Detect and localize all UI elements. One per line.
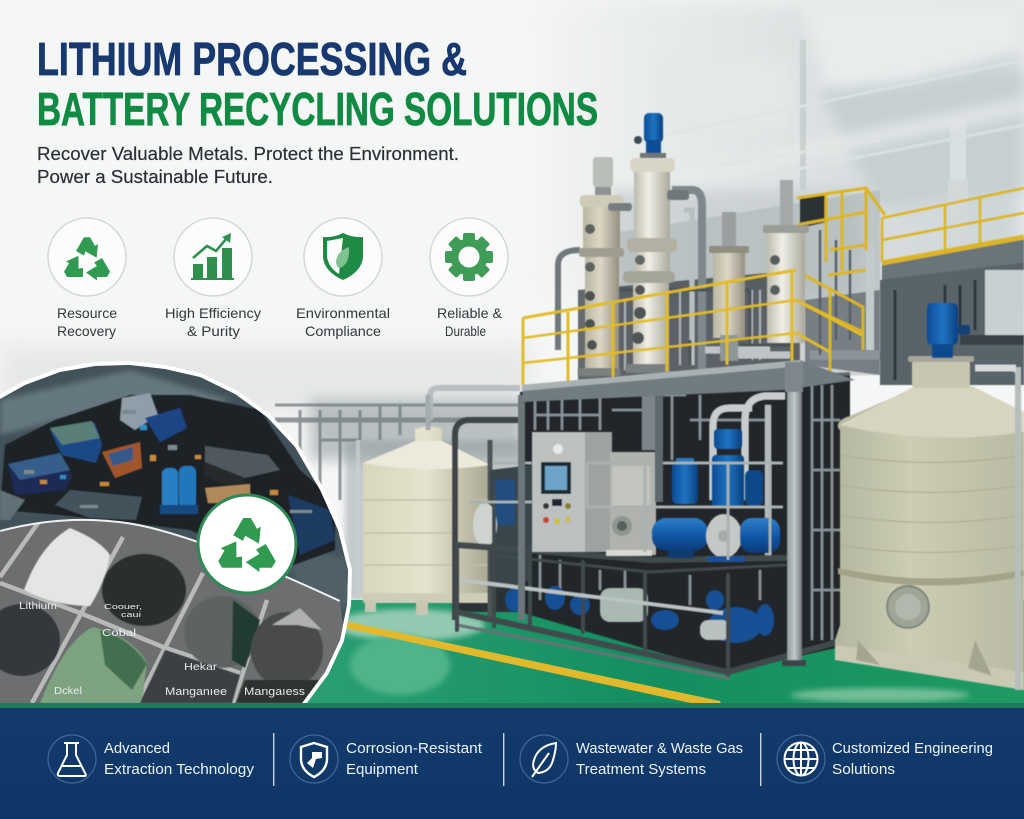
feature: customized engineering solutions: Customized Engineering [832,740,993,757]
divider [273,733,274,786]
powder labels: Manganıee [165,686,227,698]
feature: advanced extraction technology: Advanced [104,740,170,757]
battery: lower slab [55,490,142,520]
illustration: hazy factory hall backdrop [0,0,1024,600]
powder labels [19,601,306,698]
subtitle [37,144,459,187]
powder labels: Dckel [54,686,82,697]
column B [608,113,689,373]
benefit: reliable and durable [430,218,508,339]
feature: advanced extraction technology: Extraction Technology [104,761,255,778]
illustration: process columns [578,113,809,376]
title: BATTERY RECYCLING SOLUTIONS [37,83,598,135]
illustration: upper mid pipes and background gantry [558,190,885,380]
feature: customized engineering solutions [777,735,993,783]
icon: shield with leaf [304,218,382,296]
battery: orange module [102,442,142,478]
battery: left module [8,465,72,496]
powder: dark [0,604,60,676]
illustration: lower skid frame and pumps [457,465,845,678]
powder labels: Mangaıess [244,686,306,698]
divider [760,733,761,786]
icon: leaf [520,735,568,783]
benefit: high efficiency and purity: & Purity [187,323,240,339]
powder: green [40,627,147,703]
feature: corrosion-resistant equipment: Equipment [346,761,419,778]
powder: black [102,554,186,626]
icon: flask [48,735,96,783]
powder labels: Cobal [102,628,136,639]
illustration: gearbox unit [606,452,656,556]
illustration: steel deck [522,360,855,402]
steel frame [457,490,845,678]
powder labels: Coouer, [104,604,142,611]
benefit: high efficiency and purity: High Efficiency [165,305,261,321]
illustration: right upper platform [880,180,1024,385]
battery: right module [288,495,335,555]
yellow floor line [345,621,722,705]
powder labels: caui [121,612,142,619]
icon: globe [777,735,825,783]
feature: corrosion-resistant equipment: Corrosion-Resistant [346,740,483,757]
feature: customized engineering solutions: Solutions [832,761,895,778]
title: LITHIUM PROCESSING & [37,33,467,85]
subtitle: Recover Valuable Metals. Protect the Environment. [37,144,459,164]
powder labels: Hekar [184,662,218,673]
badge: recycling symbol [198,495,296,593]
powder: dark grey [251,612,323,688]
benefit: reliable and durable: Reliable & [437,305,503,321]
blue motor [634,113,666,158]
feature: advanced extraction technology [48,735,255,783]
battery: tan scraps [205,484,250,503]
photo panel: recycled batteries and metal powders [0,360,360,710]
benefit: high efficiency and purity [165,218,261,339]
illustration: control cabinet [532,432,612,552]
icon: gear [430,218,508,296]
benefit: resource recovery: Recovery [57,323,116,339]
illustration: yellow tower frame [795,188,885,372]
benefit: environmental compliance: Environmental [296,305,390,321]
title [37,33,598,135]
powder: lithium white [24,528,110,606]
icon: rising bar chart [174,218,252,296]
illustration: right large tank [835,303,1024,690]
illustration: skid handrails [470,460,783,560]
illustration: yellow handrail on deck [523,270,862,385]
feature: wastewater and waste gas treatment [520,735,743,783]
battery: top silver and blue [120,393,158,430]
benefit: environmental compliance [296,218,390,339]
benefit: reliable and durable: Durable [445,323,486,339]
pile of spent batteries [0,393,335,570]
illustration: main steel columns [518,378,806,666]
powder labels: Lithium [19,601,57,612]
icon: shield [290,735,338,783]
subtitle: Power a Sustainable Future. [37,167,273,187]
feature: wastewater and waste gas treatment: Treatment Systems [576,761,706,778]
column C [709,212,749,361]
benefit: resource recovery [48,218,126,339]
feature: corrosion-resistant equipment [290,735,483,783]
bottom band [0,703,1024,819]
benefit: environmental compliance: Compliance [305,323,381,339]
blue motor on tank [908,303,974,388]
battery: grey module [205,446,280,478]
illustration: dark pipework under the deck [458,372,850,672]
column D [763,180,809,343]
illustration: blue pumps [652,429,780,562]
powder trays [0,518,343,703]
divider [503,733,504,786]
icon: recycle [48,218,126,296]
powder: grey-green [184,596,260,668]
benefit: resource recovery: Resource [57,305,117,321]
battery: blue module [50,423,102,463]
feature: wastewater and waste gas treatment: Wastewater & Waste Gas [576,740,743,757]
illustration: green factory floor [280,600,1024,705]
illustration: left storage tank [360,395,520,620]
column A [578,157,624,376]
